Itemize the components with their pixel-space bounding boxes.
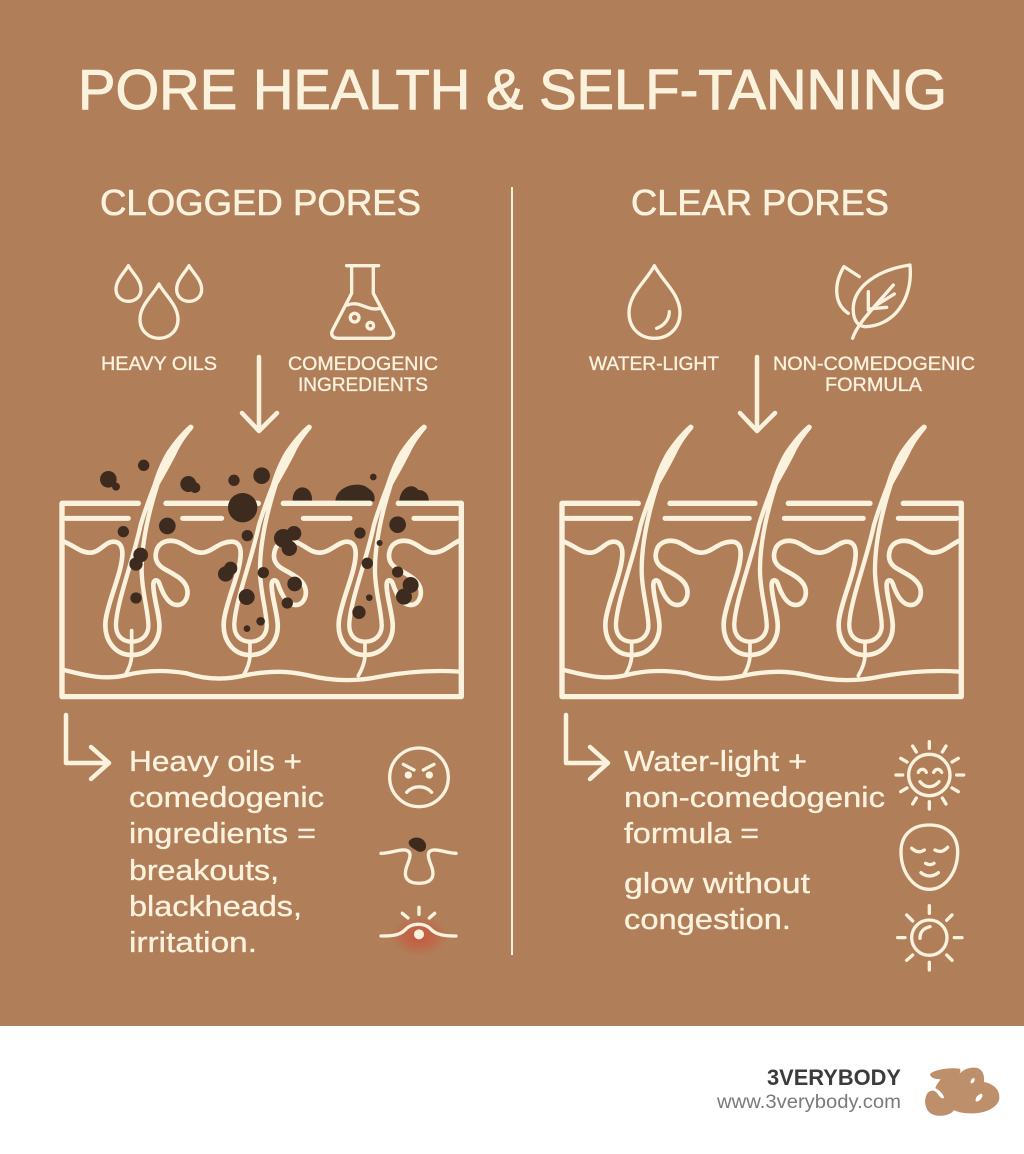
label: comedogenic ingredients bbox=[288, 353, 438, 396]
icon: irritated bump bbox=[381, 907, 456, 957]
second skin line segments bbox=[566, 511, 957, 526]
skin diagram: clear bbox=[562, 424, 961, 697]
icon: calm face bbox=[901, 825, 958, 889]
text: clogged result: comedogenic bbox=[129, 782, 324, 814]
top skin line segments bbox=[166, 495, 461, 511]
icon: leaf bbox=[837, 265, 910, 338]
arrow: result bbox=[566, 715, 608, 779]
skin diagram: clogged bbox=[62, 424, 461, 697]
text: clear result: glow without bbox=[624, 868, 810, 900]
text: clogged result bbox=[129, 746, 324, 959]
text: clear result: congestion. bbox=[624, 904, 791, 936]
panel: clogged pores bbox=[62, 182, 461, 959]
icon: angry face bbox=[390, 748, 448, 807]
brand name: 3VERYBODY bbox=[767, 1065, 901, 1090]
label: comedogenic ingredients: COMEDOGENIC bbox=[288, 353, 438, 375]
label: non-comedogenic formula: NON-COMEDOGENIC bbox=[773, 353, 975, 375]
text: clear result: Water-light + bbox=[624, 746, 807, 778]
icon: smiling sun bbox=[896, 742, 964, 809]
text: clogged result: breakouts, bbox=[129, 855, 279, 887]
logo bbox=[925, 1068, 999, 1116]
text: clogged result: Heavy oils + bbox=[129, 746, 302, 778]
label: comedogenic ingredients: INGREDIENTS bbox=[298, 374, 428, 396]
heading: clear pores: CLEAR PORES bbox=[631, 182, 889, 223]
center divider bbox=[511, 187, 513, 955]
text: clogged result: ingredients = bbox=[129, 818, 316, 850]
arrow: down bbox=[740, 357, 775, 431]
text: clogged result: irritation. bbox=[129, 927, 257, 959]
icon: glowing sun bbox=[898, 906, 962, 970]
icon: flask bbox=[332, 266, 394, 338]
label: heavy oils: HEAVY OILS bbox=[101, 353, 217, 375]
arrow: result bbox=[66, 715, 109, 779]
second skin line segments bbox=[66, 511, 457, 526]
title: PORE HEALTH & SELF-TANNING bbox=[78, 58, 947, 122]
website: www.3verybody.com bbox=[716, 1092, 901, 1113]
arrow: down bbox=[242, 357, 277, 431]
text: clear result bbox=[624, 746, 885, 936]
surface dirt bbox=[293, 485, 429, 501]
icon: water drop bbox=[629, 266, 680, 338]
icon: blackhead pore bbox=[381, 837, 456, 883]
text: clear result: non-comedogenic bbox=[624, 782, 885, 814]
text: clogged result: blackheads, bbox=[129, 891, 302, 923]
label: water-light: WATER-LIGHT bbox=[589, 353, 719, 375]
footer bbox=[0, 1026, 1024, 1154]
bulb spike bbox=[126, 631, 137, 643]
panel: clear pores bbox=[562, 182, 975, 970]
clog particles bbox=[100, 460, 419, 632]
top skin line segments bbox=[670, 495, 961, 511]
label: non-comedogenic formula bbox=[773, 353, 975, 396]
icon: oil drops bbox=[116, 266, 202, 338]
label: non-comedogenic formula: FORMULA bbox=[825, 374, 922, 396]
text: clear result: formula = bbox=[624, 818, 759, 850]
heading: clogged pores: CLOGGED PORES bbox=[100, 182, 421, 223]
